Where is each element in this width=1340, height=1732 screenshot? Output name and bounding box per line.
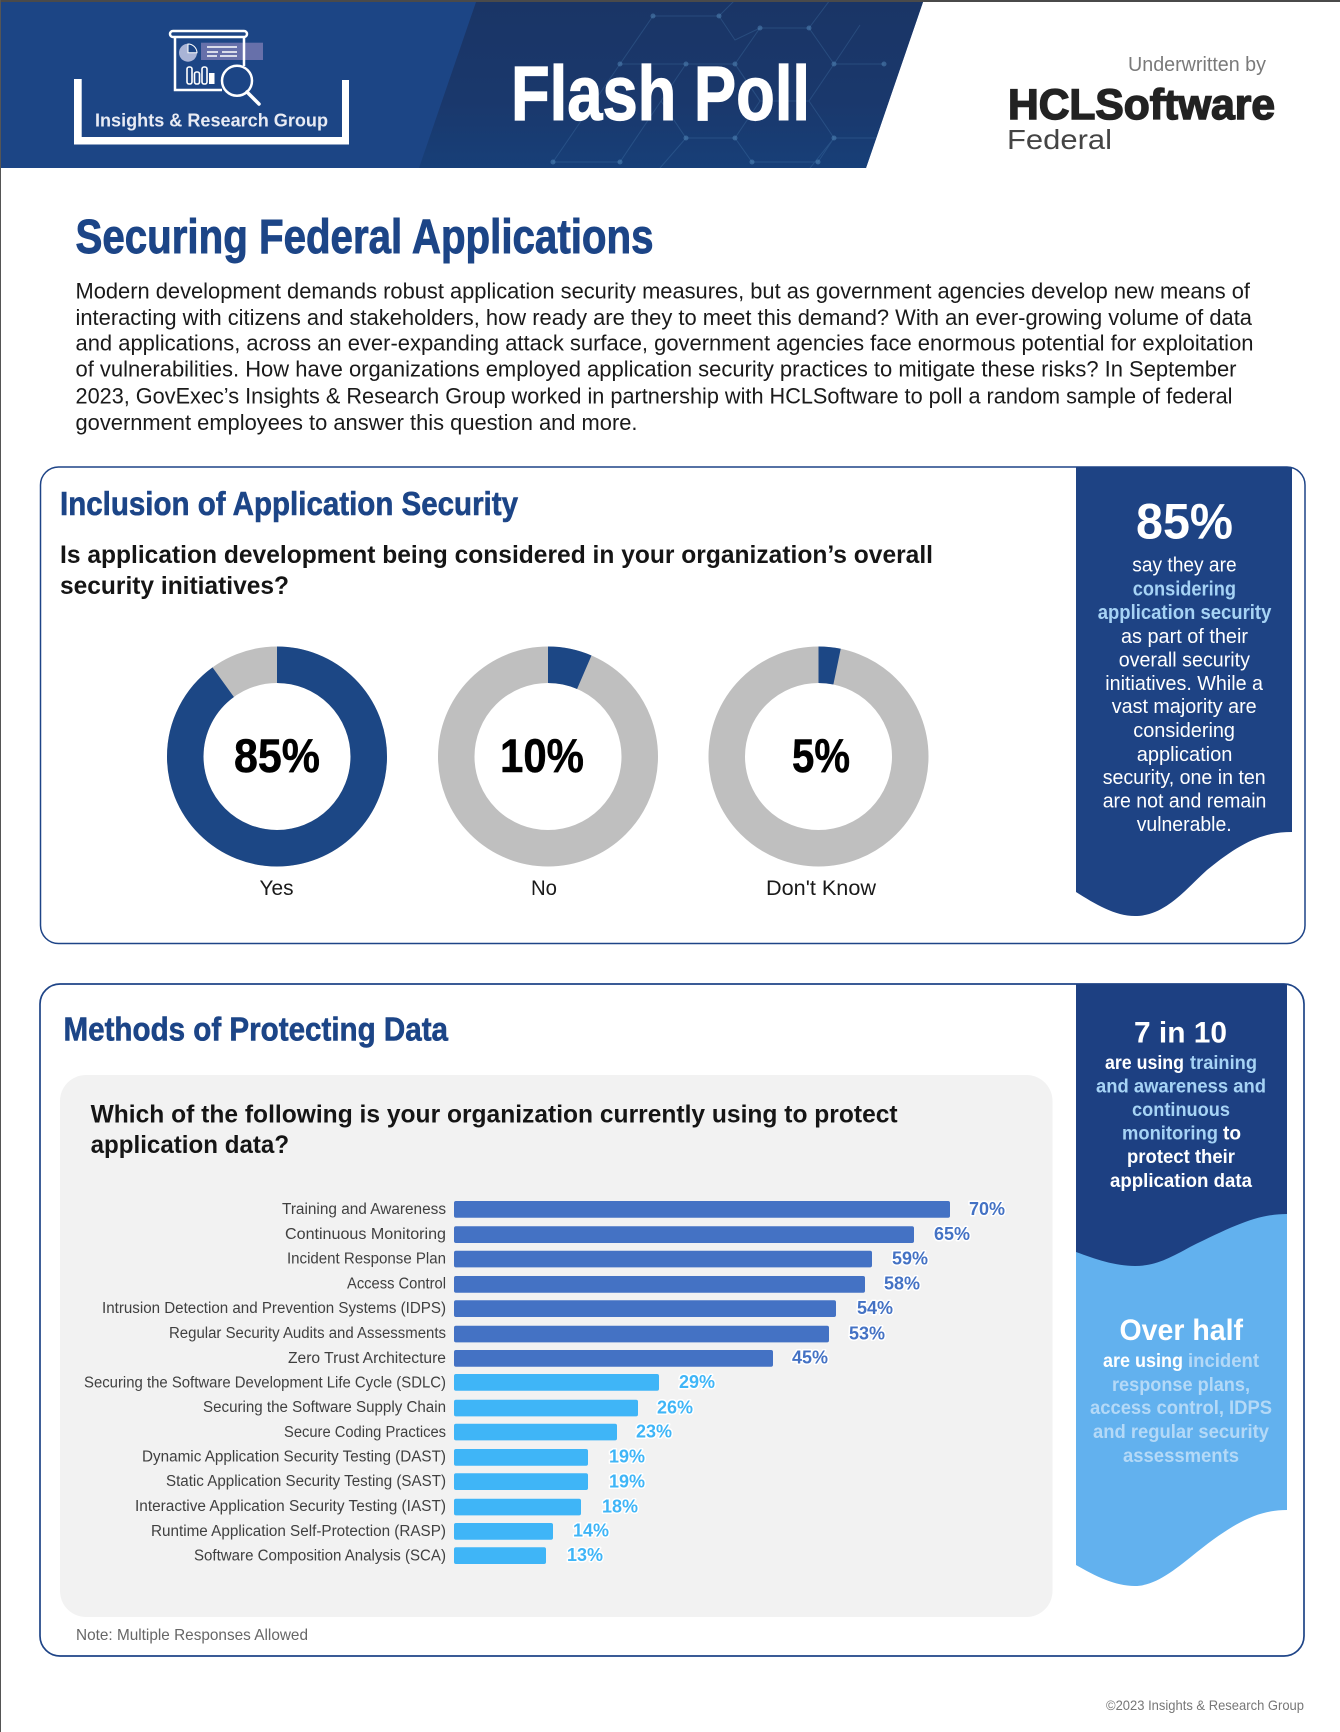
bar row: Runtime Application Self-Protection (RASP): 14% <box>573 1520 609 1540</box>
callout: 7 in 10: protect their <box>1127 1146 1235 1168</box>
callout: over half: are using <box>1103 1350 1183 1372</box>
callout: 85% considering application security: as part of their <box>1121 626 1248 648</box>
intro paragraph: interacting with citizens and stakeholders, how ready are they to meet this demand? With an ever-growing volume of data <box>76 305 1253 330</box>
callout: over half: response plans, <box>1112 1374 1250 1396</box>
intro paragraph <box>76 279 1254 435</box>
bar row: Software Composition Analysis (SCA): 13% <box>567 1545 603 1565</box>
bar row: Interactive Application Security Testing (IAST): 18% <box>602 1496 638 1516</box>
bar row: Interactive Application Security Testing (IAST) <box>135 1496 638 1516</box>
panel heading: Inclusion of Application Security <box>60 486 518 523</box>
callout: 85% considering application security: application <box>1137 744 1232 766</box>
bar row: Securing the Software Development Life Cycle (SDLC): 29% <box>679 1372 715 1392</box>
bar row: Dynamic Application Security Testing (DAST): 19% <box>609 1446 645 1466</box>
callout: over half: and regular security <box>1093 1421 1269 1443</box>
bar row: Secure Coding Practices: 23% <box>636 1422 672 1442</box>
sponsor block <box>1007 54 1275 155</box>
logo: Insights & Research Group <box>74 31 349 144</box>
survey question: Which of the following is your organization currently using to protect <box>91 1101 898 1129</box>
bar row: Securing the Software Supply Chain <box>203 1398 693 1418</box>
chart note: Note: Multiple Responses Allowed <box>76 1627 308 1644</box>
bar row: Access Control: 58% <box>884 1274 920 1294</box>
callout: 85% considering application security: overall security <box>1119 650 1250 672</box>
bar row: Access Control <box>347 1274 920 1294</box>
donut chart: No 10%: 10% <box>500 729 584 782</box>
bar row: Continuous Monitoring: Continuous Monitoring <box>285 1226 446 1243</box>
bar chart <box>84 1199 1005 1565</box>
bar row: Static Application Security Testing (SAST): Static Application Security Testing (SAST) <box>166 1473 446 1490</box>
icon: presentation board with magnifier <box>170 31 263 104</box>
callout: 7 in 10: 7 in 10 <box>1134 1017 1227 1050</box>
callout: 7 in 10: continuous <box>1132 1099 1230 1121</box>
bar row: Static Application Security Testing (SAST): 19% <box>609 1472 645 1492</box>
footer copyright: ©2023 Insights & Research Group <box>1106 1697 1304 1713</box>
bar row: Training and Awareness: 70% <box>969 1199 1005 1219</box>
donut chart: No 10%: No <box>531 877 557 900</box>
intro paragraph: government employees to answer this question and more. <box>76 410 638 435</box>
donut chart: Yes 85%: 85% <box>234 729 320 782</box>
callout: 7 in 10: are using <box>1105 1052 1184 1074</box>
bar row: Incident Response Plan <box>287 1248 928 1268</box>
bar row: Incident Response Plan: Incident Response Plan <box>287 1250 446 1268</box>
callout: over half: access control, IDPS <box>1090 1397 1272 1419</box>
callout: 85% considering application security: considering <box>1133 720 1235 742</box>
bar row: Securing the Software Development Life Cycle (SDLC) <box>84 1372 715 1392</box>
intro paragraph: of vulnerabilities. How have organizations employed application security practices to mitigate these risks? In September <box>76 357 1236 382</box>
bar row: Intrusion Detection and Prevention Systems (IDPS): 54% <box>857 1298 893 1318</box>
bar row: Runtime Application Self-Protection (RASP): Runtime Application Self-Protection (RASP) <box>151 1523 446 1540</box>
callout: over half: incident <box>1188 1350 1259 1372</box>
donut chart: Don't Know 5%: 5% <box>792 729 850 782</box>
bar row: Intrusion Detection and Prevention Systems (IDPS): Intrusion Detection and Prevention Systems (IDPS) <box>102 1300 446 1317</box>
callout: 85% considering application security: initiatives. While a <box>1105 673 1264 695</box>
bar row: Incident Response Plan: 59% <box>892 1248 928 1268</box>
bar row: Runtime Application Self-Protection (RASP) <box>151 1520 609 1540</box>
panel: methods of protecting data <box>40 984 1304 1656</box>
logo text: Insights & Research Group <box>95 110 328 130</box>
bar row: Software Composition Analysis (SCA) <box>194 1545 603 1565</box>
callout: over half <box>1076 1200 1287 1586</box>
bar row: Securing the Software Supply Chain: Securing the Software Supply Chain <box>203 1399 446 1416</box>
bar row: Intrusion Detection and Prevention Systems (IDPS) <box>102 1298 893 1318</box>
bar row: Regular Security Audits and Assessments: Regular Security Audits and Assessments <box>169 1325 446 1342</box>
panel: inclusion of application security <box>40 467 1305 944</box>
underwritten by label: Underwritten by <box>1128 54 1266 76</box>
bar row: Secure Coding Practices <box>284 1422 672 1442</box>
callout: 85% considering application security: vulnerable. <box>1137 814 1232 836</box>
survey question: Is application development being considered in your organization’s overall <box>60 541 933 569</box>
bar row: Static Application Security Testing (SAST) <box>166 1472 645 1492</box>
bar row: Interactive Application Security Testing (IAST): Interactive Application Security Testing (IAST) <box>135 1498 446 1515</box>
bar row: Dynamic Application Security Testing (DAST): Dynamic Application Security Testing (DAST) <box>142 1448 446 1466</box>
sponsor logo: Federal: Federal <box>1007 124 1112 155</box>
banner title: Flash Poll: Flash Poll <box>511 51 810 137</box>
callout: 85% considering application security: considering <box>1133 579 1236 601</box>
bar row: Training and Awareness: Training and Awareness <box>282 1201 446 1218</box>
callout: 85% considering application security: security, one in ten <box>1103 767 1266 789</box>
intro paragraph: and applications, across an ever-expanding attack surface, government agencies face enormous potential for exploitation <box>76 331 1254 356</box>
callout: 7 in 10: to <box>1223 1122 1241 1144</box>
bar row: Continuous Monitoring <box>285 1224 970 1244</box>
bar row: Training and Awareness <box>282 1199 1005 1219</box>
bar row: Securing the Software Development Life Cycle (SDLC): Securing the Software Development Life Cycle (SDLC) <box>84 1374 446 1392</box>
callout: 85% considering application security: vast majority are <box>1112 696 1257 718</box>
sponsor logo: HCLSoftware: HCLSoftware <box>1008 81 1275 129</box>
bar row: Regular Security Audits and Assessments: 53% <box>849 1324 885 1344</box>
bar row: Regular Security Audits and Assessments <box>169 1324 885 1344</box>
bar row: Access Control: Access Control <box>347 1276 446 1292</box>
callout: 7 in 10: application data <box>1110 1170 1252 1192</box>
callout: 7 in 10: training <box>1190 1052 1257 1074</box>
callout: 85% considering application security: application security <box>1098 602 1272 624</box>
callout: 7 in 10 <box>1076 984 1287 1266</box>
panel heading: Methods of Protecting Data <box>64 1012 448 1048</box>
callout: 85% considering application security: 85% <box>1136 494 1233 550</box>
header banner <box>1 0 923 168</box>
survey question <box>60 541 933 600</box>
bar row: Zero Trust Architecture <box>288 1348 828 1368</box>
bar row: Software Composition Analysis (SCA): Software Composition Analysis (SCA) <box>194 1548 446 1564</box>
callout: 7 in 10: monitoring <box>1122 1122 1218 1144</box>
callout: 85% considering application security: say they are <box>1132 555 1237 577</box>
callout: over half: Over half <box>1120 1314 1244 1347</box>
donut chart: Don't Know 5%: Don't Know <box>766 877 877 900</box>
survey question: application data? <box>91 1131 289 1159</box>
callout: 7 in 10: and awareness and <box>1096 1075 1266 1097</box>
bar row: Dynamic Application Security Testing (DAST) <box>142 1446 645 1466</box>
intro paragraph: 2023, GovExec’s Insights & Research Group worked in partnership with HCLSoftware to poll a random sample of federal <box>76 384 1232 409</box>
survey question <box>91 1101 898 1159</box>
callout: over half: assessments <box>1123 1445 1239 1467</box>
logo bracket <box>74 79 349 144</box>
callout: 85% considering application security: are not and remain <box>1103 791 1266 813</box>
chart card <box>60 1075 1052 1617</box>
donut chart: Don't Know 5% <box>727 665 910 900</box>
bar row: Zero Trust Architecture: 45% <box>792 1348 828 1368</box>
bar row: Secure Coding Practices: Secure Coding Practices <box>284 1424 446 1441</box>
callout: 85% considering application security <box>1076 467 1292 916</box>
bar row: Zero Trust Architecture: Zero Trust Architecture <box>288 1350 446 1367</box>
donut chart: Yes 85%: Yes <box>260 877 294 900</box>
donut chart: Yes 85% <box>185 665 369 900</box>
intro paragraph: Modern development demands robust application security measures, but as government agencies develop new means of <box>76 279 1251 304</box>
donut chart: No 10% <box>456 665 640 900</box>
bar row: Continuous Monitoring: 65% <box>934 1224 970 1244</box>
bar row: Securing the Software Supply Chain: 26% <box>657 1398 693 1418</box>
page title: Securing Federal Applications <box>76 211 654 264</box>
survey question: security initiatives? <box>60 572 289 600</box>
